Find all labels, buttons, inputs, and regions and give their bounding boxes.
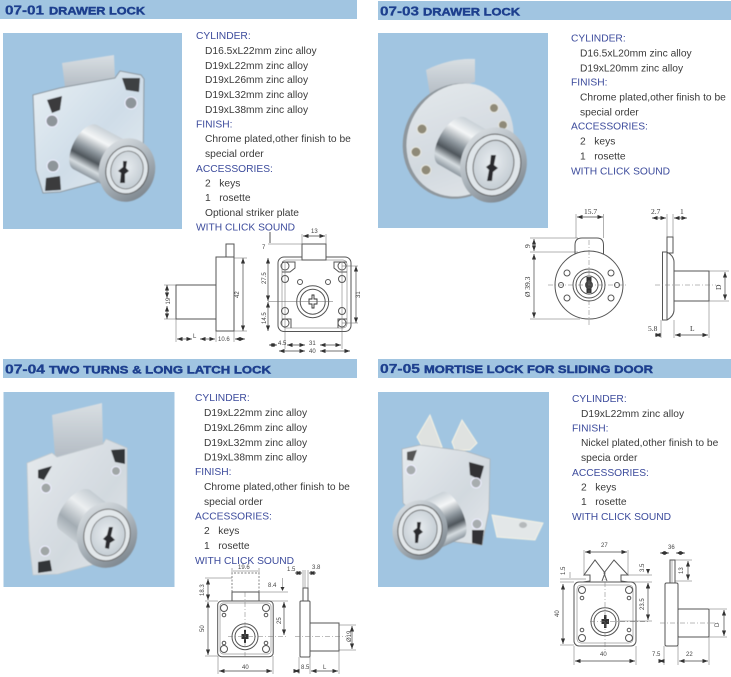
specification text: 07-04: ACCESSORIES: xyxy=(195,512,272,522)
technical drawing: 07-03: 1 xyxy=(680,207,684,216)
technical drawing: 07-05: 13 xyxy=(679,567,685,574)
heading: 07-03 drawer lock xyxy=(378,1,731,20)
heading: 07-04 two turns and long latch lock: 07-04 xyxy=(5,362,46,376)
specification text: 07-05: CYLINDER: xyxy=(572,394,627,405)
technical drawing: 07-04 xyxy=(200,565,356,674)
specification text: 07-04: special order xyxy=(204,497,263,508)
specification text: 07-04: WITH CLICK SOUND xyxy=(195,556,294,567)
specification text: 07-05: 2 keys xyxy=(581,482,616,494)
technical drawing: 07-04: 19.6 xyxy=(238,565,250,571)
specification text: 07-05: 1 rosette xyxy=(581,497,627,508)
technical drawing: 07-04: 8.4 xyxy=(268,583,277,589)
specification text: 07-03: ACCESSORIES: xyxy=(571,122,648,132)
specification text: 07-04: 1 rosette xyxy=(204,541,250,552)
heading: 07-03 drawer lock: DRAWER LOCK xyxy=(423,6,520,18)
specification text: 07-04 xyxy=(195,393,350,567)
photo: 07-05 lock xyxy=(378,392,549,587)
technical drawing: 07-04: 50 xyxy=(200,625,206,632)
panel: 07-01 drawer lock xyxy=(0,0,362,355)
technical drawing: 07-03: 9 xyxy=(523,244,532,248)
heading: 07-05 mortise lock for sliding door: 07-05 xyxy=(380,361,420,376)
technical drawing: 07-04: 1.5 xyxy=(287,567,296,573)
heading: 07-05 mortise lock for sliding door xyxy=(378,359,731,378)
technical drawing: 07-01: 31 xyxy=(309,341,316,347)
photo: 07-04 lock xyxy=(4,392,174,587)
technical drawing: 07-04: 25 xyxy=(277,617,283,624)
specification text: 07-01: D19xL32mm zinc alloy xyxy=(205,90,309,101)
specification text: 07-03: Chrome plated,other finish to be xyxy=(580,92,726,104)
panel: 07-04 two turns and long latch lock xyxy=(3,359,357,674)
technical drawing: 07-01: 13 xyxy=(311,229,318,235)
specification text: 07-03 xyxy=(571,34,726,178)
technical drawing: 07-03: 5.8 xyxy=(648,324,658,333)
specification text: 07-04: Chrome plated,other finish to be xyxy=(204,482,350,493)
technical drawing: 07-04: Ø19 xyxy=(347,630,353,642)
technical drawing: 07-05: 40 xyxy=(555,610,561,617)
specification text: 07-03: 2 keys xyxy=(580,136,615,148)
specification text: 07-03: special order xyxy=(580,108,639,118)
specification text: 07-01: ACCESSORIES: xyxy=(196,164,273,175)
specification text: 07-01: WITH CLICK SOUND xyxy=(196,222,295,234)
specification text: 07-03: 1 rosette xyxy=(580,152,626,162)
specification text: 07-04: D19xL26mm zinc alloy xyxy=(204,423,308,434)
heading: 07-04 two turns and long latch lock xyxy=(3,359,357,378)
technical drawing: 07-05: 36 xyxy=(668,545,675,551)
technical drawing: 07-05: 7.5 xyxy=(652,652,661,658)
technical drawing: 07-01: 27.5 xyxy=(262,272,268,284)
specification text: 07-05: Nickel plated,other finish to be xyxy=(581,438,719,449)
technical drawing: 07-04: L xyxy=(323,665,327,671)
specification text: 07-04: D19xL32mm zinc alloy xyxy=(204,438,308,449)
technical drawing: 07-01: L xyxy=(193,334,197,340)
technical drawing: 07-03: 15.7 xyxy=(584,207,597,216)
specification text: 07-04: D19xL22mm zinc alloy xyxy=(204,408,308,419)
technical drawing: 07-03: 2.7 xyxy=(651,207,661,216)
technical drawing: 07-01: 4.5 xyxy=(278,341,287,347)
specification text: 07-01: 1 rosette xyxy=(205,193,251,204)
technical drawing: 07-05: 23.5 xyxy=(640,598,646,610)
specification text: 07-01: 2 keys xyxy=(205,178,240,190)
specification text: 07-03: FINISH: xyxy=(571,78,607,88)
specification text: 07-01: D19xL22mm zinc alloy xyxy=(205,61,309,72)
specification text: 07-03: D16.5xL20mm zinc alloy xyxy=(580,48,693,60)
technical drawing: 07-01: 40 xyxy=(309,349,316,355)
specification text: 07-01: special order xyxy=(205,149,264,160)
specification text: 07-03: CYLINDER: xyxy=(571,34,626,44)
specification text: 07-04: FINISH: xyxy=(195,467,231,478)
specification text: 07-01: Chrome plated,other finish to be xyxy=(205,134,351,145)
specification text: 07-05 xyxy=(572,394,719,523)
technical drawing: 07-01: 14.5 xyxy=(262,312,268,324)
specification text: 07-04: CYLINDER: xyxy=(195,393,250,404)
specification text: 07-03: D19xL20mm zinc alloy xyxy=(580,64,684,74)
specification text: 07-01: FINISH: xyxy=(196,120,232,130)
specification text: 07-04: 2 keys xyxy=(204,526,239,537)
panel: 07-05 mortise lock for sliding door xyxy=(378,359,731,665)
panel: 07-03 drawer lock xyxy=(378,1,731,338)
technical drawing: 07-01: 42 xyxy=(235,291,241,298)
specification text: 07-01 xyxy=(196,31,351,234)
technical drawing: 07-05: 3.5 xyxy=(640,563,646,572)
technical drawing: 07-05: 1.5 xyxy=(561,566,567,575)
technical drawing: 07-05 xyxy=(555,543,727,665)
technical drawing: 07-03: Ø 39.3 xyxy=(523,276,532,297)
specification text: 07-04: D19xL38mm zinc alloy xyxy=(204,452,308,464)
technical drawing: 07-01: 7 xyxy=(262,245,266,251)
heading: 07-01 drawer lock: 07-01 xyxy=(5,2,44,18)
photo: 07-01 lock xyxy=(3,33,182,229)
specification text: 07-05: ACCESSORIES: xyxy=(572,468,649,479)
technical drawing: 07-04: 8.5 xyxy=(301,665,310,671)
technical drawing: 07-05: 40 xyxy=(600,652,607,658)
technical drawing: 07-01 xyxy=(164,229,362,355)
specification text: 07-01: CYLINDER: xyxy=(196,31,251,42)
heading: 07-01 drawer lock xyxy=(0,0,357,19)
technical drawing: 07-04: 18.3 xyxy=(200,584,206,596)
specification text: 07-01: D16.5xL22mm zinc alloy xyxy=(205,46,318,57)
technical drawing: 07-01: 10.6 xyxy=(218,337,230,343)
technical drawing: 07-03: L xyxy=(690,324,695,333)
specification text: 07-01: D19xL38mm zinc alloy xyxy=(205,105,309,116)
technical drawing: 07-05: D xyxy=(715,622,721,627)
photo: 07-03 lock xyxy=(378,33,548,228)
specification text: 07-05: WITH CLICK SOUND xyxy=(572,512,671,523)
specification text: 07-01: D19xL26mm zinc alloy xyxy=(205,75,309,86)
technical drawing: 07-04: 40 xyxy=(242,665,249,671)
heading: 07-04 two turns and long latch lock: TWO TURNS & LONG LATCH LOCK xyxy=(49,364,271,376)
specification text: 07-05: FINISH: xyxy=(572,424,608,434)
specification text: 07-05: specia order xyxy=(581,453,638,464)
specification text: 07-05: D19xL22mm zinc alloy xyxy=(581,409,685,420)
heading: 07-03 drawer lock: 07-03 xyxy=(380,4,419,18)
technical drawing: 07-01: 31 xyxy=(356,291,362,298)
heading: 07-01 drawer lock: DRAWER LOCK xyxy=(49,6,145,18)
heading: 07-05 mortise lock for sliding door: MORTISE LOCK FOR SLIDING DOOR xyxy=(424,364,653,376)
specification text: 07-01: Optional striker plate xyxy=(205,208,299,219)
technical drawing: 07-05: 22 xyxy=(686,652,693,658)
specification text: 07-03: WITH CLICK SOUND xyxy=(571,166,670,178)
technical drawing: 07-03 xyxy=(523,207,729,338)
technical drawing: 07-04: 3.8 xyxy=(312,565,321,571)
technical drawing: 07-05: 27 xyxy=(601,543,608,549)
technical drawing: 07-01: 19 xyxy=(166,297,172,304)
technical drawing: 07-03: D xyxy=(714,284,723,290)
